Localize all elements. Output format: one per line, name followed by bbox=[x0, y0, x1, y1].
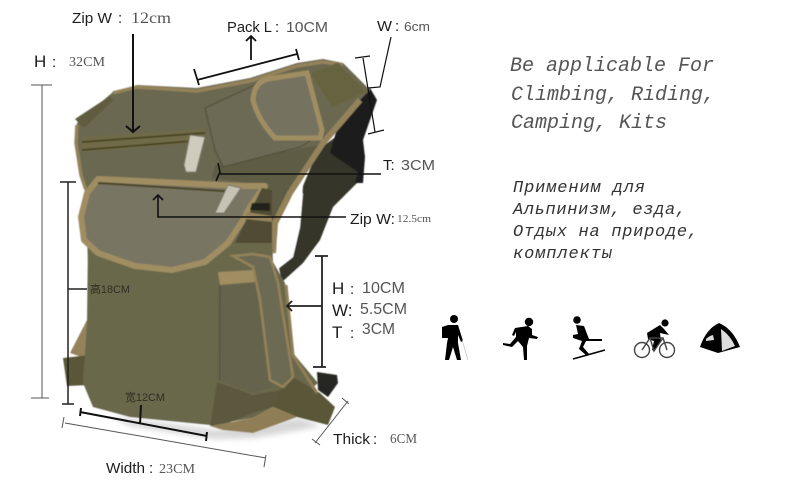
label: 18CM: 高18CM bbox=[90, 282, 130, 296]
left leg strap trim bbox=[70, 318, 90, 360]
shoulder strap trim bbox=[273, 100, 360, 253]
text block: Russian applicability: Отдых на природе, bbox=[513, 223, 698, 242]
label: W 6cm: W bbox=[377, 18, 393, 35]
label: W 6cm: 6cm bbox=[404, 19, 430, 34]
label: W 6cm bbox=[377, 18, 430, 35]
icon: skier bbox=[573, 316, 605, 359]
18CM bracket bbox=[60, 182, 87, 404]
label: 12CM: 宽12CM bbox=[125, 390, 165, 404]
velcro tab bbox=[310, 63, 367, 108]
label: H 32CM: : bbox=[52, 54, 56, 71]
white gap bbox=[277, 193, 303, 268]
left side trim bbox=[76, 125, 86, 190]
label: T 3CM: T: bbox=[383, 157, 395, 174]
bag photo bbox=[63, 59, 377, 439]
dimension lines on bag bbox=[31, 34, 391, 467]
label: small pocket sizes: : bbox=[350, 325, 354, 342]
heading: English applicability bbox=[510, 55, 715, 135]
rear shoulder strap bbox=[279, 130, 360, 282]
label: zip W 12cm: Zip W bbox=[72, 10, 113, 27]
label: thick 6CM bbox=[333, 431, 418, 448]
dimension labels bbox=[34, 10, 435, 477]
label: width 23CM: : bbox=[149, 460, 153, 477]
upper pocket zipper bbox=[82, 129, 205, 152]
label: pack L 10CM: Pack L bbox=[227, 19, 272, 36]
pack L bracket and arrow bbox=[194, 36, 299, 85]
zip W 12.5 leader bbox=[153, 195, 346, 217]
heading: English applicability: Climbing, Riding, bbox=[511, 84, 715, 107]
label: T 3CM bbox=[383, 157, 435, 174]
zipper pull 2 bbox=[215, 185, 241, 213]
label: zip W 12cm bbox=[72, 10, 172, 27]
zipper pull 1 bbox=[184, 135, 205, 172]
left corner tab bbox=[75, 96, 113, 128]
heading: English applicability: Camping, Kits bbox=[511, 112, 667, 135]
label: W 6cm: : bbox=[395, 18, 399, 35]
black buckle bbox=[330, 88, 377, 183]
small pocket bbox=[205, 84, 320, 167]
label: thick 6CM: 6CM bbox=[390, 432, 418, 447]
label: small pocket sizes: 5.5CM bbox=[360, 301, 407, 318]
label: small pocket sizes: 10CM bbox=[362, 280, 405, 297]
label: H 32CM bbox=[34, 52, 106, 71]
icon: runner bbox=[503, 318, 538, 360]
width 23CM bracket bbox=[62, 417, 266, 467]
label: width 23CM: Width bbox=[106, 460, 145, 477]
label: T 3CM: 3CM bbox=[401, 157, 435, 174]
small pocket H bracket bbox=[287, 256, 328, 367]
label: small pocket sizes: 3CM bbox=[362, 321, 395, 338]
text block: Russian applicability bbox=[512, 179, 698, 264]
front zipper bbox=[98, 183, 238, 192]
icon: hiker bbox=[442, 315, 468, 360]
upper pocket body bbox=[75, 59, 370, 262]
right trim line bbox=[286, 285, 317, 393]
small pocket flap bbox=[253, 73, 322, 138]
icon: tent bbox=[700, 323, 740, 353]
label: pack L 10CM: 10CM bbox=[286, 19, 328, 36]
front pocket right gusset bbox=[235, 188, 272, 243]
left leg strap bbox=[63, 355, 90, 386]
text block: Russian applicability: комплекты bbox=[513, 245, 613, 264]
label: small pocket sizes: T bbox=[332, 323, 342, 342]
label: width 23CM: 23CM bbox=[159, 462, 196, 477]
label: zip W 12.5cm: Zip W: bbox=[350, 211, 395, 228]
label: small pocket sizes: W: bbox=[332, 301, 352, 320]
text block: Russian applicability: Альпинизм, езда, bbox=[512, 201, 686, 220]
label: pack L 10CM: : bbox=[275, 19, 279, 36]
front pocket flap bbox=[81, 179, 265, 270]
side pocket strap bbox=[233, 254, 293, 387]
top trim bbox=[113, 62, 343, 93]
label: thick 6CM: : bbox=[373, 431, 377, 448]
activity icons bbox=[442, 315, 740, 360]
label: zip W 12cm: 12cm bbox=[131, 10, 172, 27]
label: H 32CM: 32CM bbox=[69, 55, 106, 70]
label: thick 6CM: Thick bbox=[333, 431, 371, 448]
heading: English applicability: Be applicable For bbox=[510, 55, 714, 78]
lower side panel bbox=[210, 382, 280, 426]
W 6cm bracket bbox=[355, 37, 391, 134]
base trim bbox=[210, 407, 297, 433]
darker lower area of upper body bbox=[212, 145, 320, 262]
inner 12CM bracket bbox=[80, 405, 207, 441]
thick 6CM bracket bbox=[312, 398, 349, 445]
side pocket bbox=[217, 282, 273, 393]
right buckle bbox=[317, 372, 338, 397]
icon: cyclist bbox=[634, 319, 674, 358]
label: width 23CM bbox=[106, 460, 196, 477]
lower bag body bbox=[83, 240, 318, 425]
H 32CM bracket bbox=[31, 85, 52, 398]
T 3CM leader bbox=[216, 163, 381, 181]
label: H 32CM: H bbox=[34, 52, 46, 71]
leg strap bbox=[273, 377, 335, 425]
label: zip W 12.5cm bbox=[350, 211, 431, 228]
label: zip W 12.5cm: 12.5cm bbox=[397, 214, 431, 225]
text block: Russian applicability: Применим для bbox=[513, 179, 645, 198]
label: small pocket sizes: : bbox=[350, 281, 354, 298]
label: small pocket sizes: H bbox=[332, 279, 344, 298]
label: zip W 12cm: : bbox=[118, 10, 122, 27]
label: pack L 10CM bbox=[227, 19, 328, 36]
label: small pocket sizes bbox=[332, 279, 407, 342]
zip W arrow bbox=[126, 34, 140, 132]
ground shadow bbox=[110, 416, 322, 439]
